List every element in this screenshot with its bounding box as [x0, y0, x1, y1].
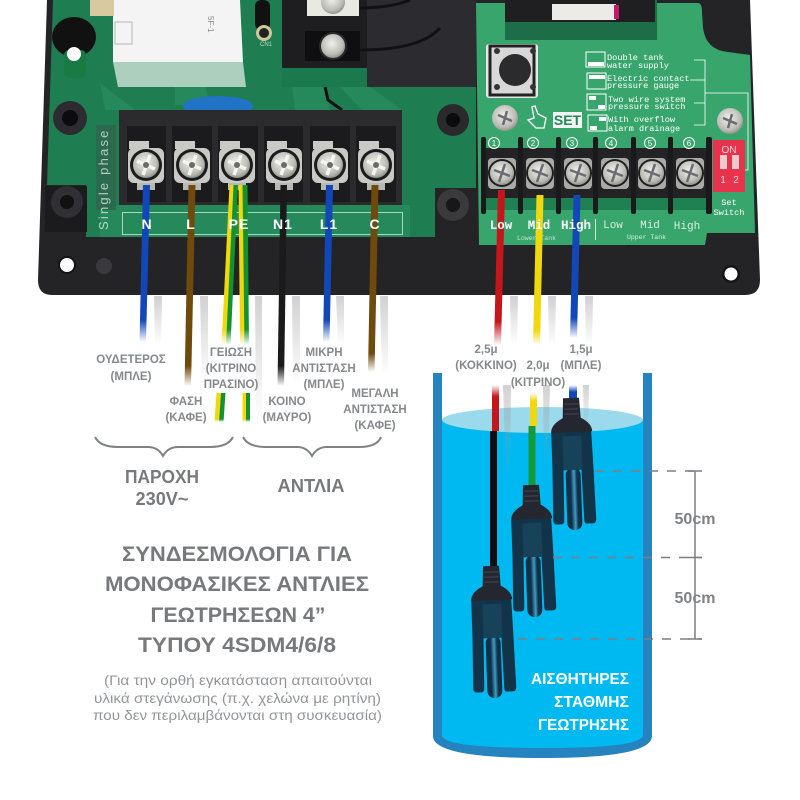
main title: ΣΥΝΔΕΣΜΟΛΟΓΙΑ ΓΙΑ	[122, 542, 352, 566]
upper wire: yellow	[533, 195, 544, 345]
push button	[486, 44, 538, 98]
installation note: που δεν περιλαμβάνονται στη συσκευασία)	[93, 708, 382, 723]
switch mode legend: alarm drainage	[608, 124, 680, 134]
terminal letters	[141, 216, 381, 232]
board traces	[100, 83, 410, 237]
rubber peg lower left	[45, 186, 87, 232]
dip switch: 2	[733, 175, 739, 186]
labels: supply and pump wires: ΦΑΣΗ	[170, 396, 202, 408]
sensor mid	[509, 484, 557, 618]
switch mode legend: pressure switch	[608, 102, 685, 112]
set switch label	[714, 198, 744, 218]
single phase label: Single phase	[96, 128, 111, 230]
lower and upper tank labels: Mid	[640, 220, 660, 232]
upper terminal block	[282, 0, 367, 87]
labels: supply and pump wires: (ΚΑΦΕ)	[165, 412, 207, 424]
labels: supply and pump wires: (ΜΠΛΕ)	[111, 371, 152, 383]
terminal numbers: 4	[609, 139, 614, 148]
labels: supply and pump wires	[96, 347, 407, 432]
ribbon connector	[505, 0, 657, 40]
dip switch: 1	[720, 175, 726, 186]
set switch label: Switch	[714, 208, 744, 218]
tank wire: yellow to green	[528, 393, 537, 486]
low, mid, high labels	[490, 219, 591, 233]
brace: supply	[95, 437, 233, 456]
sensor low	[469, 565, 517, 699]
mounting hole top left	[52, 17, 96, 78]
terminal numbers: 6	[687, 139, 692, 148]
relay: 5F-1	[206, 16, 215, 33]
installation note	[93, 673, 382, 723]
wires: earth upper	[222, 185, 249, 345]
red, yellow, blue lead labels: 2,5μ	[474, 344, 498, 356]
main title: ΤΥΠΟΥ 4SDM4/6/8	[138, 633, 336, 657]
red, yellow, blue lead labels: 1,5μ	[569, 344, 593, 356]
main title	[105, 542, 369, 657]
labels: supply and pump wires: ΜΙΚΡΗ	[305, 347, 343, 359]
red, yellow, blue lead labels	[455, 344, 602, 389]
terminal numbers: 5	[648, 139, 653, 148]
wire: phase brown	[184, 185, 196, 386]
terminal letters: L1	[320, 216, 338, 232]
supply label	[125, 467, 199, 509]
sensors caption: ΓΕΩΤΡΗΣΗΣ	[538, 717, 629, 734]
sensors caption	[531, 671, 629, 734]
switch mode legend	[586, 52, 748, 170]
upper wire: blue	[570, 195, 580, 338]
tank wire: red to black	[490, 385, 499, 567]
black trace	[325, 87, 342, 110]
terminal letters: C	[369, 216, 381, 232]
internal cables	[360, 0, 440, 50]
mounting hole bottom left	[58, 256, 112, 274]
terminal letters: N	[141, 216, 153, 232]
labels: supply and pump wires: ΚΟΙΝΟ	[268, 396, 306, 408]
board screws	[492, 105, 743, 134]
pump label: ΑΝΤΛΙΑ	[278, 476, 344, 496]
upper wire: red	[494, 190, 505, 345]
main circuit board	[47, 0, 476, 237]
installation note: (Για την ορθή εγκατάσταση απαιτούνται	[104, 673, 372, 688]
connector CN1: CN1	[260, 42, 273, 48]
icon: pointing hand	[528, 106, 546, 128]
main title: ΜΟΝΟΦΑΣΙΚΕΣ ΑΝΤΛΙΕΣ	[105, 572, 369, 596]
dimension labels	[675, 511, 715, 607]
red, yellow, blue lead labels: (ΚΟΚΚΙΝΟ)	[455, 360, 517, 372]
red, yellow, blue lead labels: (ΜΠΛΕ)	[561, 360, 602, 372]
main terminal block	[119, 110, 402, 205]
wire: high resistance brown	[368, 185, 378, 372]
switch mode legend: pressure gauge	[607, 81, 679, 91]
labels: supply and pump wires: (ΜΑΥΡΟ)	[263, 412, 312, 424]
switch mode legend: water supply	[607, 61, 669, 71]
sensors caption: ΣΤΑΘΜΗΣ	[554, 694, 629, 711]
terminal numbers: 3	[570, 139, 575, 148]
labels: supply and pump wires: ΜΕΓΑΛΗ	[351, 388, 399, 400]
labels: supply and pump wires: (ΚΙΤΡΙΝΟ	[206, 363, 256, 375]
low, mid, high labels: Low	[490, 219, 513, 233]
labels: supply and pump wires: ΓΕΙΩΣΗ	[210, 347, 252, 359]
dimension guides	[518, 471, 702, 639]
dip switch	[713, 140, 745, 192]
labels: supply and pump wires: ΑΝΤΙΣΤΑΣΗ	[292, 363, 356, 375]
terminal letters: PE	[229, 216, 249, 232]
lower and upper tank labels: Lower Tank	[517, 235, 556, 242]
lower and upper tank labels: Upper Tank	[627, 234, 666, 241]
low, mid, high labels: High	[561, 219, 591, 233]
main title: ΓΕΩΤΡΗΣΕΩΝ 4”	[150, 603, 326, 627]
labels: supply and pump wires: (ΜΠΛΕ)	[304, 379, 345, 391]
labels: supply and pump wires: ΟΥΔΕΤΕΡΟΣ	[96, 354, 166, 366]
wires: earth lower	[214, 393, 250, 422]
terminal letters: L	[186, 216, 196, 232]
sensor high	[549, 397, 597, 531]
switch mode legend: With overflow	[608, 115, 676, 125]
labels: supply and pump wires: (ΚΑΦΕ)	[354, 420, 396, 432]
relay	[90, 0, 246, 87]
switch mode legend: Two wire system	[608, 95, 685, 105]
rubber peg left	[53, 101, 87, 135]
switch mode legend: Double tank	[607, 53, 664, 63]
wire: neutral blue	[140, 185, 150, 342]
wire: common black	[278, 185, 287, 386]
blue capacitor	[183, 96, 253, 116]
installation note: υλικά στεγάνωσης (π.χ. χελώνα με ρητίνη)	[94, 691, 381, 706]
sensors caption: ΑΙΣΘΗΤΗΡΕΣ	[531, 671, 629, 688]
switch mode legend: Electric contact	[607, 74, 690, 84]
supply label: 230V~	[136, 489, 188, 509]
lower and upper tank labels	[517, 219, 700, 242]
terminal numbers: 1	[492, 139, 497, 148]
red, yellow, blue lead labels: (ΚΙΤΡΙΝΟ)	[511, 377, 565, 389]
labels: supply and pump wires: ΑΝΤΙΣΤΑΣΗ	[343, 404, 407, 416]
reflections in the tank	[503, 385, 589, 480]
terminal numbers: 2	[531, 139, 536, 148]
terminal letters: N1	[273, 216, 293, 232]
lower and upper tank labels: High	[674, 221, 700, 233]
wire: low resistance blue	[323, 185, 333, 342]
mounting hole bottom right	[722, 265, 740, 283]
set switch label: Set	[721, 198, 737, 208]
set badge: SET	[554, 112, 582, 128]
dimension labels: 50cm	[675, 590, 715, 607]
red, yellow, blue lead labels: 2,0μ	[526, 360, 550, 372]
interior shading	[367, 0, 476, 87]
low, mid, high labels: Mid	[528, 219, 550, 233]
pegs right of main board	[437, 104, 469, 221]
brace: pump	[243, 437, 381, 456]
second circuit board	[476, 3, 755, 245]
terminal label frame	[122, 212, 402, 234]
wire reflections	[154, 296, 593, 420]
dip switch: ON	[722, 145, 736, 156]
connector CN1	[255, 0, 273, 48]
tank wire: blue	[569, 385, 577, 399]
lower and upper tank labels: Low	[603, 220, 623, 232]
enclosure body	[38, 0, 760, 295]
well tank	[433, 373, 652, 758]
supply label: ΠΑΡΟΧΗ	[125, 467, 199, 487]
dimension labels: 50cm	[675, 511, 715, 528]
labels: supply and pump wires: ΠΡΑΣΙΝΟ)	[204, 379, 258, 391]
sensor terminal block	[481, 137, 712, 214]
terminal numbers	[488, 138, 694, 148]
